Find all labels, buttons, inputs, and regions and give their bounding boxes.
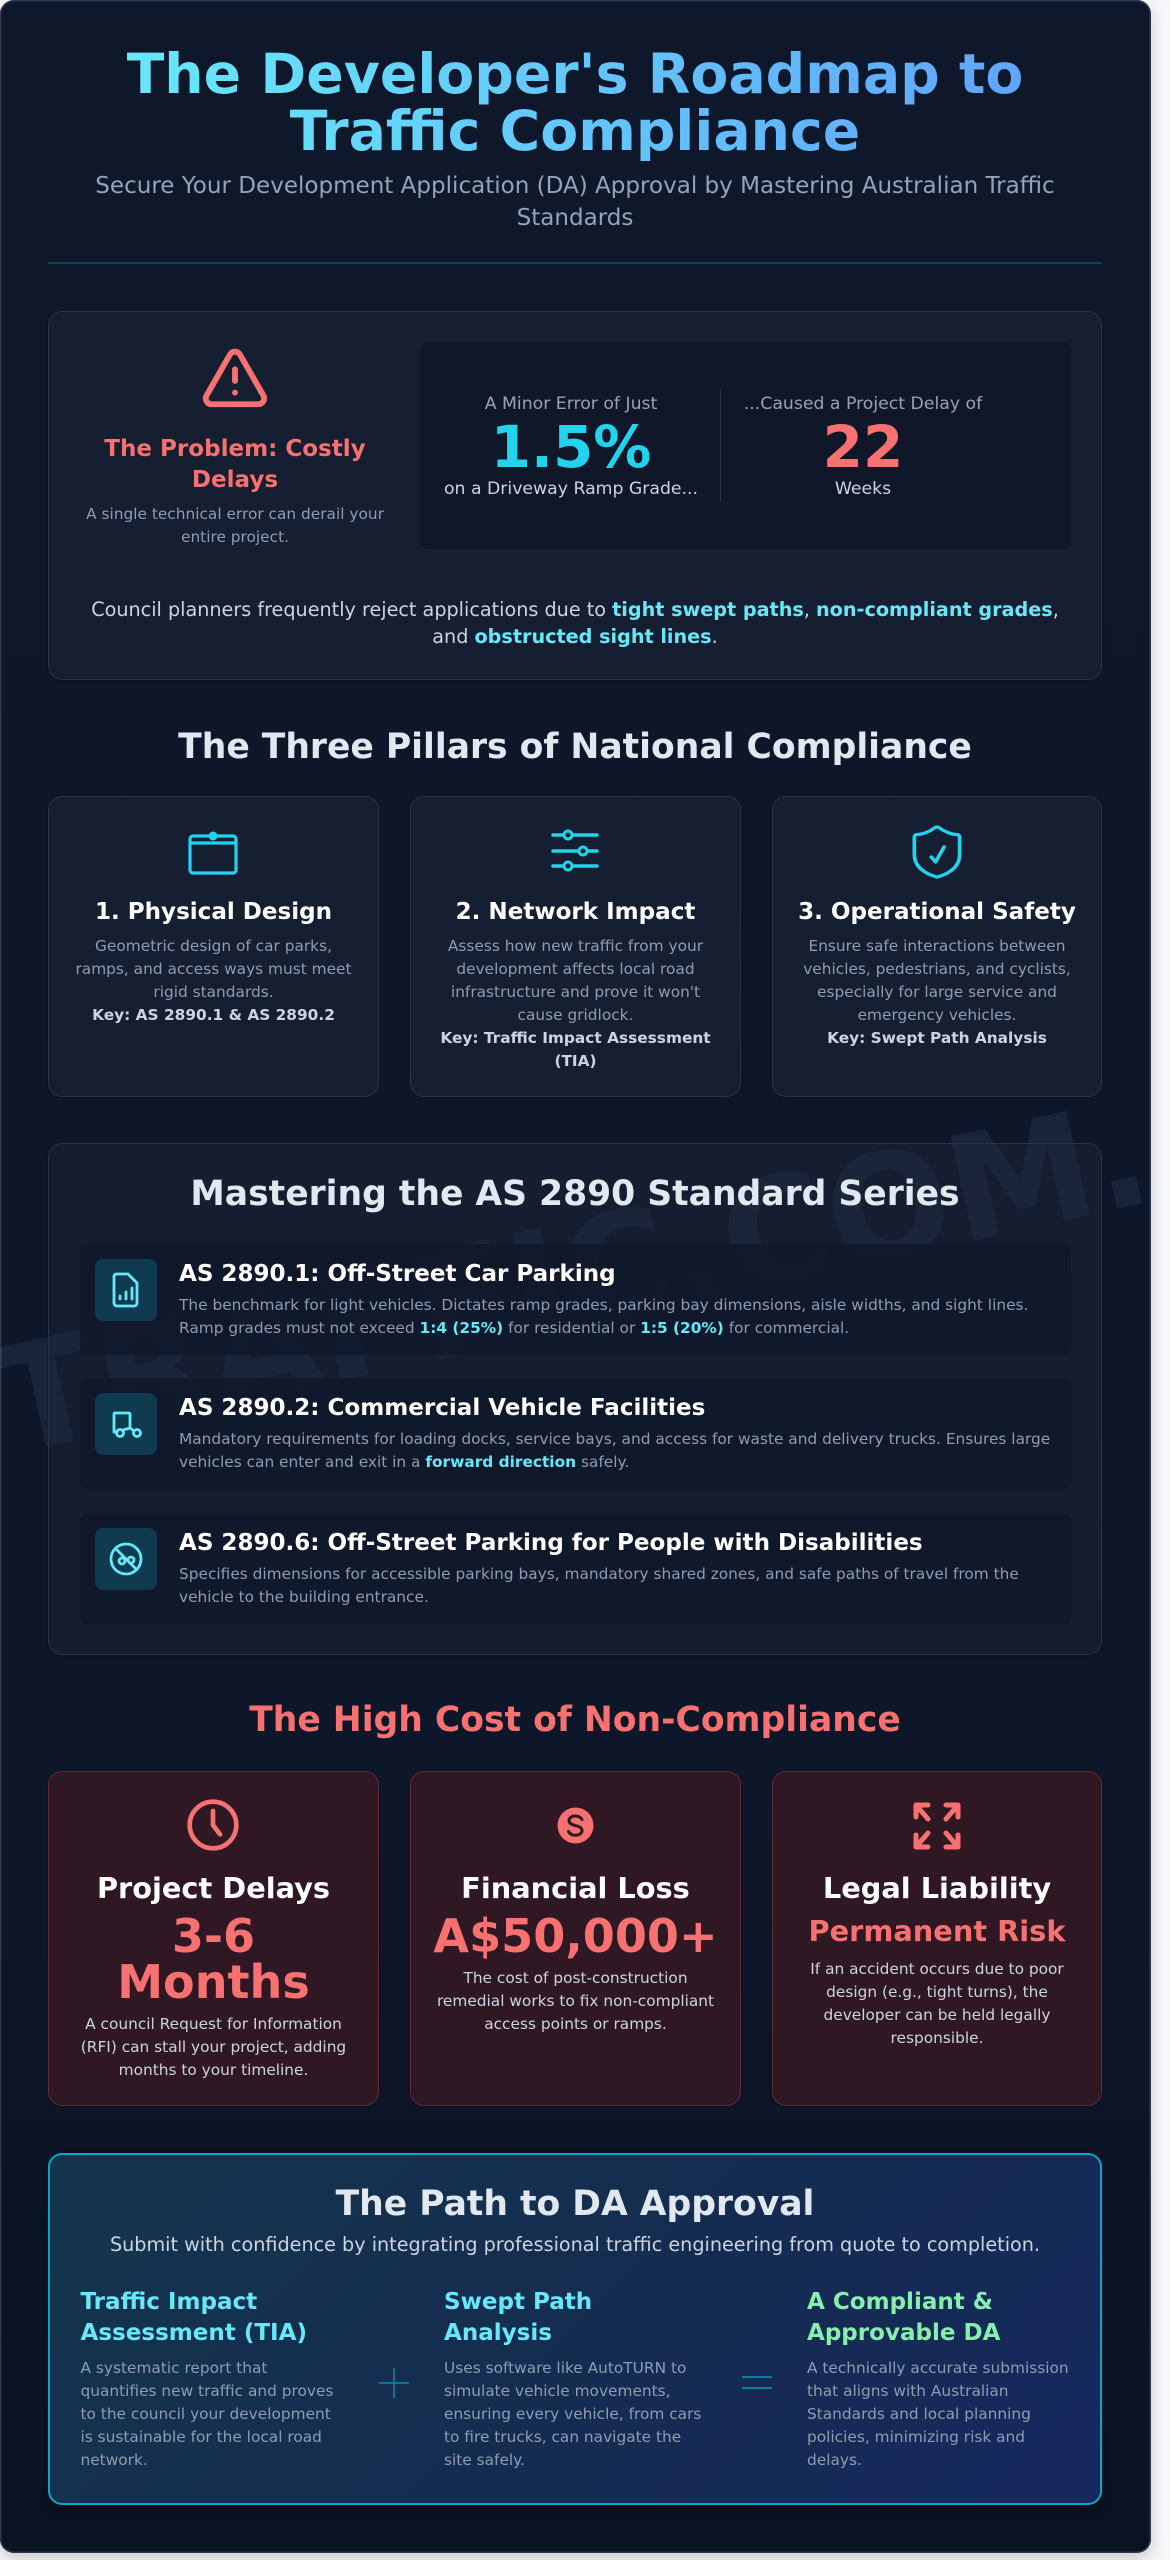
column: traffic impact assessment: Traffic Impact bbox=[80, 2289, 257, 2315]
pillar text: development affects local road bbox=[456, 960, 695, 978]
cost figure: Permanent Risk bbox=[809, 1914, 1065, 1948]
column: compliant DA: A technically accurate submission bbox=[807, 2359, 1069, 2377]
standard text: AS 2890.6: Off-Street Parking for People with Disabilities bbox=[179, 1530, 923, 1556]
cost heading: Project Delays bbox=[97, 1871, 330, 1905]
standard text: Specifies dimensions for accessible parking bays, mandatory shared zones, and safe paths of travel from the bbox=[179, 1565, 1019, 1583]
pillar text: Assess how new traffic from your bbox=[448, 936, 703, 954]
title bbox=[127, 43, 1023, 164]
pillar text: cause gridlock. bbox=[518, 1006, 633, 1024]
panel: operational safety bbox=[772, 796, 1102, 1097]
cost description: access points or ramps. bbox=[484, 2015, 667, 2033]
pillar text: Key: Traffic Impact Assessment bbox=[440, 1028, 711, 1046]
cost heading: Legal Liability bbox=[823, 1871, 1051, 1905]
council text: Council planners frequently reject applications due to tight swept paths, non-compliant grades, bbox=[91, 598, 1059, 621]
column: compliant DA: Approvable DA bbox=[807, 2320, 1000, 2346]
standard text: AS 2890.1: Off-Street Car Parking bbox=[179, 1261, 616, 1287]
pillar text: Ensure safe interactions between bbox=[808, 936, 1066, 954]
panel: path to DA approval bbox=[48, 2153, 1102, 2505]
pillar text bbox=[440, 899, 711, 1070]
standard text: vehicles can enter and exit in a forward direction safely. bbox=[179, 1453, 629, 1471]
cost description bbox=[81, 2015, 346, 2079]
standard text: Ramp grades must not exceed 1:4 (25%) for residential or 1:5 (20%) for commercial. bbox=[179, 1319, 849, 1337]
stat: 22 weeks: ...Caused a Project Delay of bbox=[744, 394, 982, 414]
panel: the problem bbox=[48, 311, 1102, 680]
subtitle: Standards bbox=[517, 205, 633, 231]
panel: project delays bbox=[48, 1771, 379, 2106]
column: compliant DA bbox=[807, 2289, 1069, 2469]
equals sign bbox=[742, 2376, 772, 2389]
stat: 1.5 percent bbox=[444, 394, 698, 499]
column: swept path analysis: to fire trucks, can navigate the bbox=[444, 2428, 681, 2446]
column: compliant DA: Standards and local planning bbox=[807, 2405, 1031, 2423]
stat box bbox=[420, 342, 1071, 549]
standard text: Mandatory requirements for loading docks, service bays, and access for waste and delivery trucks. Ensures large bbox=[179, 1430, 1050, 1448]
council text bbox=[91, 598, 1059, 648]
icon: accessibility circle bbox=[95, 1528, 157, 1590]
standard text: The benchmark for light vehicles. Dictates ramp grades, parking bay dimensions, aisle widths, and sight lines. bbox=[179, 1296, 1028, 1314]
pillar text: 2. Network Impact bbox=[456, 899, 695, 925]
title: The Developer's Roadmap to bbox=[127, 43, 1023, 107]
cost description bbox=[437, 1969, 714, 2033]
pillar text: especially for large service and bbox=[817, 982, 1057, 1000]
subtitle bbox=[95, 173, 1055, 231]
standard text: vehicle to the building entrance. bbox=[179, 1588, 429, 1606]
subtitle: Secure Your Development Application (DA) Approval by Mastering Australian Traffic bbox=[95, 173, 1055, 199]
cost description: responsible. bbox=[891, 2029, 983, 2047]
title: Traffic Compliance bbox=[290, 100, 860, 164]
stat: 1.5 percent: on a Driveway Ramp Grade... bbox=[444, 479, 698, 499]
column: traffic impact assessment: to the council your development bbox=[80, 2405, 331, 2423]
council text: and obstructed sight lines. bbox=[432, 625, 718, 648]
pillar text bbox=[75, 899, 352, 1024]
panel: AS 2890 standard series bbox=[48, 1143, 1102, 1655]
pillar text: 3. Operational Safety bbox=[798, 899, 1076, 925]
column: swept path analysis: Analysis bbox=[444, 2320, 552, 2346]
column: traffic impact assessment: Assessment (TIA) bbox=[80, 2320, 307, 2346]
pillar text: ramps, and access ways must meet bbox=[75, 960, 352, 978]
column: traffic impact assessment bbox=[80, 2289, 333, 2469]
pillar text: (TIA) bbox=[554, 1052, 597, 1070]
cost figure bbox=[117, 1909, 310, 2009]
cost description: If an accident occurs due to poor bbox=[810, 1960, 1064, 1978]
cost heading: Financial Loss bbox=[461, 1871, 690, 1905]
stat: 22 weeks bbox=[744, 394, 983, 499]
column: traffic impact assessment: is sustainable for the local road bbox=[80, 2428, 322, 2446]
cost figure: Months bbox=[117, 1955, 310, 2009]
problem heading: The Problem: Costly bbox=[104, 436, 366, 462]
standard text bbox=[179, 1530, 1019, 1606]
icon: document chart bbox=[95, 1259, 157, 1321]
cost figure: 3-6 bbox=[172, 1909, 255, 1963]
cost description: design (e.g., tight turns), the bbox=[826, 1983, 1048, 2001]
cost description: The cost of post-construction bbox=[463, 1969, 688, 1987]
heading: path: The Path to DA Approval bbox=[336, 2184, 814, 2224]
stat: 1.5 percent: 1.5% bbox=[491, 413, 651, 481]
panel: network impact bbox=[410, 796, 741, 1097]
cost description: remedial works to fix non-compliant bbox=[437, 1992, 714, 2010]
cost description: developer can be held legally bbox=[824, 2006, 1050, 2024]
icon: dollar coin bbox=[558, 1808, 594, 1844]
column: swept path analysis: ensuring every vehicle, from cars bbox=[444, 2405, 701, 2423]
pillar text: rigid standards. bbox=[153, 982, 274, 1000]
cost description bbox=[810, 1960, 1064, 2047]
panel: legal liability bbox=[772, 1771, 1102, 2106]
problem description: entire project. bbox=[181, 528, 289, 546]
pillar text: emergency vehicles. bbox=[858, 1006, 1016, 1024]
path subheading: Submit with confidence by integrating professional traffic engineering from quote to completion. bbox=[110, 2233, 1040, 2256]
column: swept path analysis: Uses software like AutoTURN to bbox=[444, 2359, 686, 2377]
pillar text: Key: Swept Path Analysis bbox=[827, 1028, 1047, 1046]
icon: shield check bbox=[912, 825, 962, 879]
icon: physical design bbox=[188, 832, 238, 875]
stat: 22 weeks: Weeks bbox=[835, 479, 891, 499]
icon: sliders bbox=[551, 830, 599, 872]
heading: three pillars: The Three Pillars of National Compliance bbox=[178, 727, 972, 767]
column: swept path analysis: Swept Path bbox=[444, 2289, 592, 2315]
column: swept path analysis: site safely. bbox=[444, 2451, 525, 2469]
problem description: A single technical error can derail your bbox=[86, 505, 384, 523]
standard: AS 2890.6 bbox=[80, 1513, 1071, 1624]
standard: AS 2890.2 bbox=[80, 1378, 1071, 1489]
icon: truck bbox=[95, 1393, 157, 1455]
column: swept path analysis: simulate vehicle movements, bbox=[444, 2382, 671, 2400]
plus sign bbox=[379, 2368, 409, 2398]
icon: expand arrows bbox=[914, 1802, 960, 1850]
column: traffic impact assessment: quantifies new traffic and proves bbox=[80, 2382, 333, 2400]
pillar text: infrastructure and prove it won't bbox=[451, 982, 700, 1000]
pillar text: vehicles, pedestrians, and cyclists, bbox=[803, 960, 1071, 978]
standard text: AS 2890.2: Commercial Vehicle Facilities bbox=[179, 1395, 705, 1421]
heading: AS 2890: Mastering the AS 2890 Standard Series bbox=[190, 1174, 960, 1214]
pillar text: Key: AS 2890.1 & AS 2890.2 bbox=[92, 1006, 335, 1024]
stat: 22 weeks: 22 bbox=[823, 413, 903, 481]
problem heading: Delays bbox=[192, 467, 278, 493]
column: traffic impact assessment: network. bbox=[80, 2451, 148, 2469]
standard: AS 2890.1 bbox=[80, 1244, 1071, 1355]
standard text bbox=[179, 1395, 1050, 1471]
heading: high cost: The High Cost of Non-Compliance bbox=[249, 1700, 901, 1740]
panel: physical design bbox=[48, 796, 379, 1097]
cost description: A council Request for Information bbox=[85, 2015, 342, 2033]
column: traffic impact assessment: A systematic report that bbox=[80, 2359, 267, 2377]
icon: warning triangle bbox=[202, 348, 268, 408]
column: compliant DA: A Compliant & bbox=[807, 2289, 993, 2315]
panel: financial loss bbox=[410, 1771, 741, 2106]
column: compliant DA: policies, minimizing risk and bbox=[807, 2428, 1025, 2446]
problem heading bbox=[104, 436, 366, 493]
pillar text: 1. Physical Design bbox=[95, 899, 332, 925]
stat: 1.5 percent: A Minor Error of Just bbox=[485, 394, 657, 414]
standard text bbox=[178, 1261, 1028, 1337]
cost description: (RFI) can stall your project, adding bbox=[81, 2038, 346, 2056]
cost description: months to your timeline. bbox=[119, 2061, 308, 2079]
column: compliant DA: that aligns with Australian bbox=[807, 2382, 1009, 2400]
problem description bbox=[86, 505, 384, 546]
column: swept path analysis bbox=[444, 2289, 701, 2469]
pillar text bbox=[798, 899, 1076, 1046]
column: compliant DA: delays. bbox=[807, 2451, 862, 2469]
cost figure: A$50,000+ bbox=[433, 1909, 718, 1963]
icon: clock bbox=[187, 1799, 239, 1851]
pillar text: Geometric design of car parks, bbox=[95, 936, 332, 954]
